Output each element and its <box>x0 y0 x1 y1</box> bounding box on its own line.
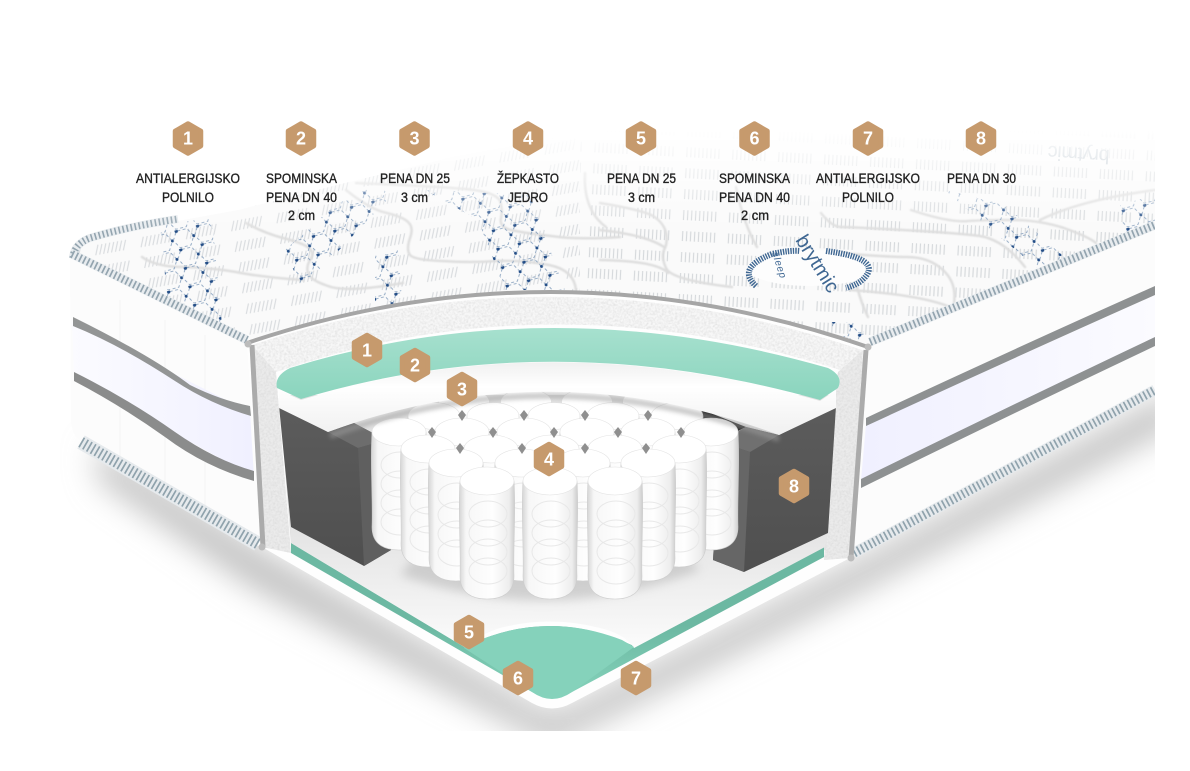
spring row 1 <box>439 392 666 418</box>
badge 7 label: 7 <box>863 128 873 148</box>
badge 4 label <box>497 124 559 205</box>
marker 1: 1 <box>362 340 372 360</box>
marker 7 <box>623 663 649 693</box>
badge 6 label: PENA DN 40 <box>719 190 790 205</box>
top badges with labels <box>136 124 1016 223</box>
marker 4 <box>536 444 562 474</box>
badge 3 label: 3 <box>409 128 420 148</box>
badge 5 label <box>607 124 676 205</box>
marker 5: 5 <box>464 622 474 642</box>
badge 2 label: 2 cm <box>288 208 315 223</box>
woven stripes <box>78 155 580 335</box>
ground shadow <box>95 392 1175 745</box>
badge 6 label <box>719 124 790 223</box>
marker 7: 7 <box>631 668 641 688</box>
interior backing <box>284 395 828 556</box>
right lavender band <box>861 380 968 478</box>
badge 7 label <box>816 124 920 205</box>
faint logo at the back: brytmic <box>1047 141 1110 167</box>
layer 4: pocket spring core <box>371 389 739 599</box>
spring row 5 <box>428 449 676 581</box>
quilted top surface <box>78 144 1155 342</box>
badge 4 label: 4 <box>523 128 533 148</box>
marker 8: 8 <box>789 476 799 496</box>
left side panel of mattress <box>73 300 260 550</box>
marker 2: 2 <box>410 356 420 376</box>
layer 3: upper foam DN 25 <box>279 362 836 435</box>
badge 5 label: 3 cm <box>628 190 655 205</box>
marker 4: 4 <box>544 450 554 470</box>
badge 7 label: ANTIALERGIJSKO <box>816 171 920 186</box>
layer 2: green memory foam <box>277 328 840 400</box>
badge 8 label: 8 <box>976 128 986 148</box>
layer 5: lower foam DN 25 <box>291 543 824 648</box>
right bottom piping <box>854 390 1155 553</box>
top piping <box>72 219 1155 342</box>
white outer shell <box>265 548 848 708</box>
marker 5 <box>456 617 482 647</box>
right side panel of mattress <box>854 286 1155 557</box>
badge 4 label: JEDRO <box>508 190 548 205</box>
quilting seams <box>142 173 1155 317</box>
badge 2 label: PENA DN 40 <box>266 190 337 205</box>
badge 1 label: ANTIALERGIJSKO <box>136 171 240 186</box>
shadow under upper foam <box>330 396 779 439</box>
badge 4 label: ŽEPKASTO <box>497 171 559 186</box>
marker 2 <box>402 350 428 380</box>
logo: quilted oval <box>747 141 1110 297</box>
badge 1 label: POLNILO <box>162 190 214 205</box>
layer 8: left gray perimeter foam block <box>279 406 391 566</box>
left lavender band <box>120 348 254 470</box>
spring row 2 <box>408 402 704 435</box>
left foam strip <box>252 345 291 553</box>
badge 1 label: 1 <box>183 128 193 148</box>
blue honeycomb clusters <box>160 218 222 325</box>
badge 8 label: PENA DN 30 <box>947 171 1016 186</box>
badge 2 label <box>266 124 337 223</box>
marker 3: 3 <box>457 380 467 400</box>
badge 2 label: SPOMINSKA <box>266 171 337 186</box>
badge 3 label: 3 cm <box>401 190 428 205</box>
badge 1 label <box>136 124 240 205</box>
marker 6 <box>505 663 531 693</box>
left bottom piping <box>81 442 258 544</box>
badge 3 label <box>380 124 450 205</box>
badge 6 label: 2 cm <box>741 208 769 223</box>
spring row 3 <box>371 418 739 550</box>
badge 5 label: 5 <box>636 128 646 148</box>
spring gap shadows <box>428 410 685 454</box>
badge 2 label: 2 <box>296 128 306 148</box>
logo: quilted oval: brytmic <box>791 231 843 297</box>
badge 5 label: PENA DN 25 <box>607 171 676 186</box>
badge 6 label: SPOMINSKA <box>719 171 790 186</box>
logo: quilted oval: sleep <box>769 251 788 280</box>
badge 8 label <box>947 124 1016 186</box>
cross-section shell <box>244 292 872 708</box>
gray edge strips <box>247 292 868 347</box>
marker 1 <box>354 335 380 365</box>
badge 7 label: POLNILO <box>842 190 894 205</box>
marker 3 <box>449 374 475 404</box>
spring row 4 <box>400 435 707 567</box>
marker 8 <box>781 471 807 501</box>
badge 3 label: PENA DN 25 <box>380 171 450 186</box>
spring row 6 front <box>459 467 643 599</box>
badge 6 label: 6 <box>749 128 760 148</box>
layer 6: green memory foam corner <box>464 626 634 699</box>
layer 8: right gray perimeter foam block <box>713 406 836 572</box>
marker 6: 6 <box>513 668 523 688</box>
diagram number badges <box>354 335 807 693</box>
layer 7: lower green antiallergic layer <box>291 543 824 698</box>
right foam strip <box>824 350 863 560</box>
top foam cover <box>252 297 864 380</box>
